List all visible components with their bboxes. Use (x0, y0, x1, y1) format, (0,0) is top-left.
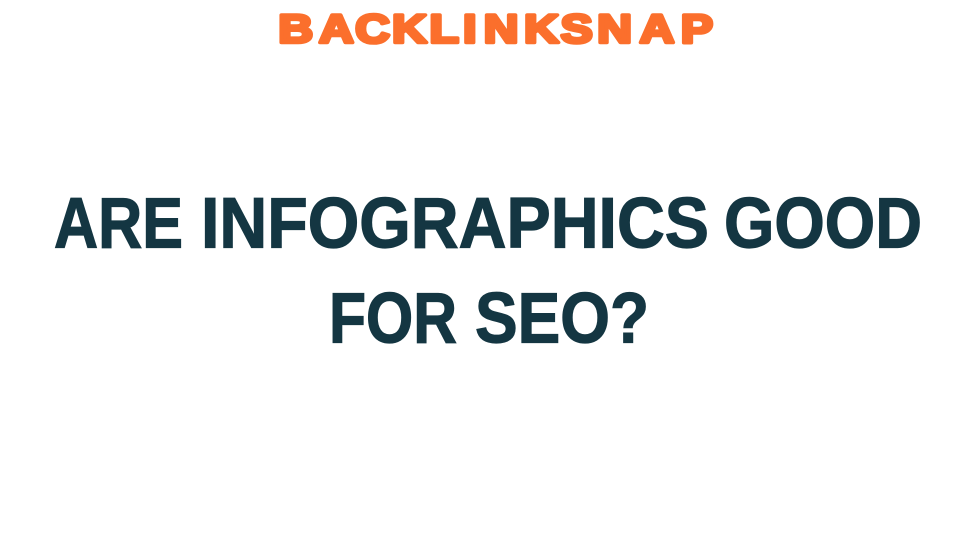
title (54, 184, 922, 358)
title: GOOD (724, 184, 922, 264)
title: ARE (54, 184, 183, 264)
title: INFOGRAPHICS (201, 184, 709, 264)
logo: BACKLINKSNAP: BACKLINKSNAP (278, 7, 713, 52)
title: SEO? (475, 280, 649, 358)
title: FOR (329, 280, 457, 358)
